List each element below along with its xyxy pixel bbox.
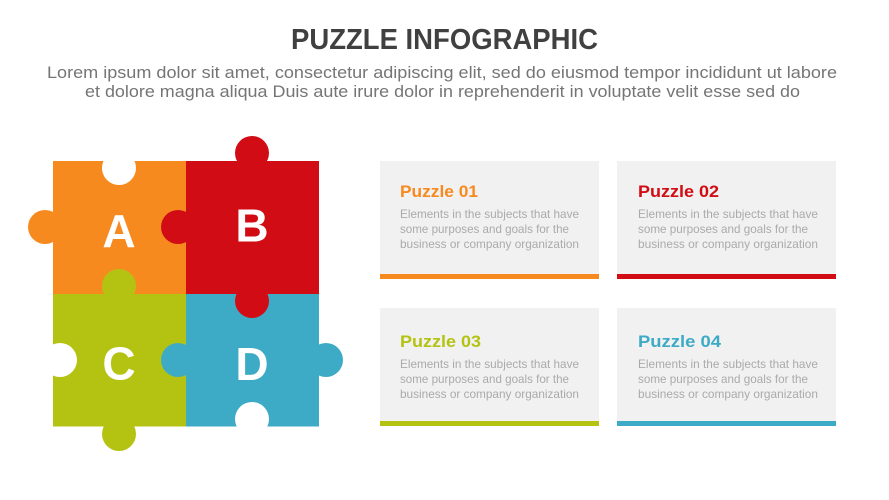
letter C: C — [102, 338, 136, 390]
panel: Puzzle 03 — [380, 308, 599, 426]
body text: Puzzle 01: business or company organization — [400, 237, 579, 251]
letter A: A — [102, 205, 136, 257]
panel: Puzzle 01 — [380, 161, 599, 279]
subtitle text block: et dolore magna aliqua Duis aute irure dolor in reprehenderit in voluptate velit esse sed do — [85, 83, 800, 101]
body text: Puzzle 02: some purposes and goals for the — [638, 222, 808, 236]
body text: Puzzle 02 — [638, 207, 818, 251]
puzzle piece A — [28, 161, 186, 294]
puzzle graphic — [28, 136, 343, 451]
body text: Puzzle 03 — [400, 357, 579, 401]
body text: Puzzle 03: Elements in the subjects that have — [400, 357, 579, 371]
heading: Puzzle 02: Puzzle 02 — [638, 183, 719, 201]
body text: Puzzle 02: business or company organization — [638, 237, 818, 251]
title: PUZZLE INFOGRAPHIC — [291, 24, 598, 56]
heading: Puzzle 04: Puzzle 04 — [638, 333, 722, 351]
body text: Puzzle 03: some purposes and goals for the — [400, 372, 569, 386]
body text: Puzzle 01 — [400, 207, 579, 251]
letter D: D — [235, 338, 269, 390]
letter B: B — [235, 200, 269, 252]
red tabs overlapping A and D — [161, 210, 269, 318]
puzzle piece C — [53, 269, 186, 451]
white notches — [43, 151, 269, 436]
puzzle piece B — [186, 136, 319, 294]
body text: Puzzle 01: some purposes and goals for the — [400, 222, 569, 236]
body text: Puzzle 03: business or company organization — [400, 387, 579, 401]
heading: Puzzle 03: Puzzle 03 — [400, 333, 481, 351]
body text: Puzzle 02: Elements in the subjects that have — [638, 207, 818, 221]
panel: Puzzle 04 — [617, 308, 836, 426]
subtitle text block — [47, 64, 837, 101]
body text: Puzzle 04: Elements in the subjects that have — [638, 357, 818, 371]
body text: Puzzle 01: Elements in the subjects that have — [400, 207, 579, 221]
puzzle piece D — [161, 294, 343, 426]
body text: Puzzle 04 — [638, 357, 818, 401]
body text: Puzzle 04: some purposes and goals for the — [638, 372, 808, 386]
panel: Puzzle 02 — [617, 161, 836, 279]
heading: Puzzle 01: Puzzle 01 — [400, 183, 478, 201]
body text: Puzzle 04: business or company organization — [638, 387, 818, 401]
subtitle text block: Lorem ipsum dolor sit amet, consectetur adipiscing elit, sed do eiusmod tempor incididunt ut labore — [47, 64, 837, 82]
